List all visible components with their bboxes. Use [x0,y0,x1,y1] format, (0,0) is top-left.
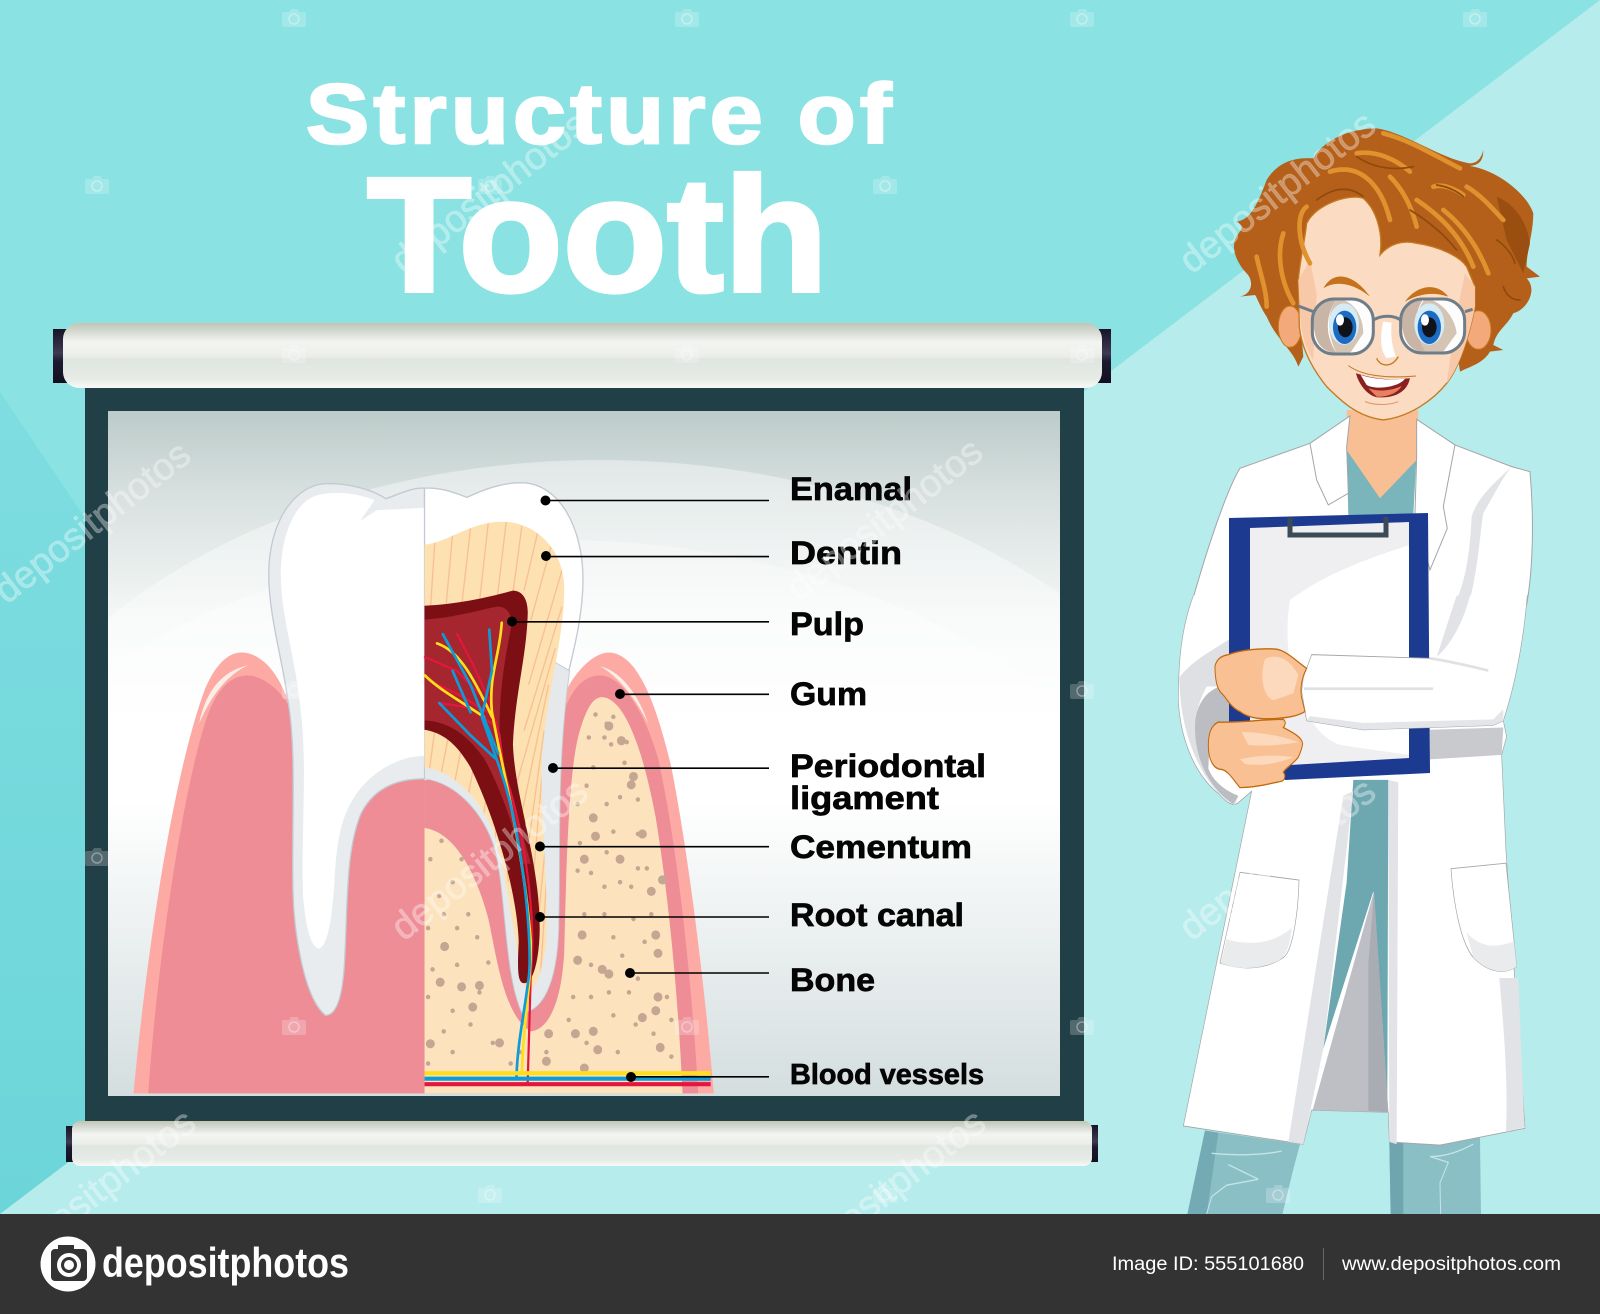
nerves and blood vessels [425,623,711,1084]
watermarks: depositphotos [1171,103,1384,282]
neck and scrubs [1347,447,1417,515]
left gum [133,652,425,1093]
watermarks: depositphotos [781,1101,994,1280]
watermarks: depositphotos [1171,770,1384,949]
bottom roller [66,1121,1098,1166]
screen frame [85,388,1084,1121]
top roller [53,323,1111,388]
lower coat [1178,595,1527,1145]
labels: Periodontal [790,748,986,784]
root ligament and enamel [425,483,583,1013]
lapels [1310,416,1350,505]
labels: Enamal [790,471,912,507]
hair strands [1257,133,1503,307]
hair [1234,128,1540,372]
title: Structure of [306,67,896,161]
title: Tooth [367,143,828,326]
watermarks: depositphotos [383,103,596,282]
labels: Bone [790,962,875,998]
labels: Dentin [790,535,902,571]
tooth diagram [133,483,714,1093]
eyebrows [1323,277,1370,297]
right gum and bone [425,653,714,1093]
watermarks: depositphotos [778,430,991,609]
labels: Blood vessels [790,1059,984,1091]
head [1234,128,1540,420]
forearm sleeve [1302,627,1523,730]
watermarks: depositphotos [383,770,596,949]
labels: ligament [790,780,939,816]
watermark camera icons [85,9,1487,1203]
lower hand [1208,719,1303,788]
site url: www.depositphotos.com [1341,1254,1561,1275]
image id: Image ID: 555101680 [1112,1254,1304,1275]
labels: Pulp [790,606,864,642]
dentin [425,522,564,995]
logo wordmark: depositphotos [102,1239,349,1286]
legs [1187,1131,1481,1214]
screen [108,411,1060,1096]
footer bar [0,1214,1600,1314]
labels: Gum [790,676,867,712]
labels: Root canal [790,897,964,933]
panel: chart scroll [53,323,1111,1166]
face [1298,197,1475,420]
coat pockets [1220,872,1299,968]
leader lines and dots [507,496,769,1082]
nose [1381,322,1396,358]
mouth [1348,366,1416,405]
left tooth exterior [269,484,425,1015]
clipboard [1229,513,1430,780]
arms and hands [1208,627,1523,788]
upper hand [1215,649,1307,719]
ears [1278,306,1302,347]
arm shadows [1179,639,1238,805]
labels [790,471,986,1091]
doctor character [1178,128,1540,1214]
upper coat [1192,410,1532,605]
glasses and eyes [1298,299,1473,354]
pulp and root canal [425,591,540,983]
watermarks [0,103,1384,1280]
labels: Cementum [790,829,972,865]
icon: camera logo [40,1236,96,1292]
title [306,67,896,326]
bone pores [428,715,671,1068]
